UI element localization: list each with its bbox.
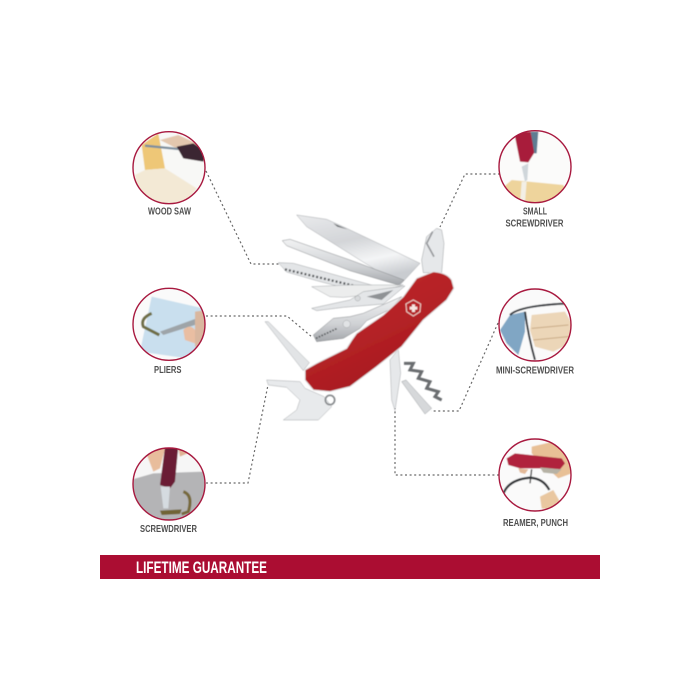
can opener tool: [267, 380, 332, 420]
leader line: small screwdriver: [440, 174, 500, 227]
leader line: pliers: [206, 316, 312, 337]
label: MINI-SCREWDRIVER: [496, 366, 575, 376]
banner: lifetime guarantee: [100, 555, 600, 579]
photo: punching a leather belt: [503, 442, 570, 510]
wood saw blade: [278, 263, 375, 289]
nail file blade: [282, 239, 404, 285]
key ring: [325, 395, 335, 405]
label: REAMER, PUNCH: [503, 518, 568, 529]
label: SMALL: [523, 206, 547, 218]
scissors: [312, 285, 405, 311]
leader line: screwdriver: [206, 385, 268, 483]
ring: [499, 289, 571, 361]
corkscrew: [404, 363, 442, 400]
panel: mini-screwdriver: [496, 287, 575, 376]
photo: small screwdriver on wood: [505, 132, 564, 202]
label: SCREWDRIVER: [140, 524, 198, 535]
label: WOOD SAW: [148, 206, 191, 218]
banner text: LIFETIME GUARANTEE: [136, 558, 267, 577]
bottom small blade: [390, 349, 401, 411]
panel: wood saw: [130, 128, 207, 218]
photo: pliers and hook: [140, 296, 204, 358]
panel: screwdriver: [130, 447, 207, 535]
pliers: [313, 297, 402, 342]
illustration: multi-tool knife: [265, 215, 454, 420]
main blade: [297, 215, 420, 285]
ring: [499, 439, 571, 511]
leader line: wood saw: [206, 171, 282, 264]
top right tool: [422, 228, 444, 273]
panel: reamer, punch: [497, 437, 573, 529]
leader line: reamer, punch: [395, 408, 499, 475]
panel: pliers: [130, 287, 207, 376]
photo: screwing a hook: [134, 448, 204, 520]
saw teeth: [285, 269, 363, 288]
reamer shaft: [402, 380, 432, 414]
panel: small screwdriver: [497, 128, 573, 230]
photo: repairing glasses: [500, 302, 570, 360]
ring: [133, 288, 205, 360]
ring: [133, 448, 205, 520]
ring: [499, 131, 571, 203]
cross shield logo: [406, 300, 421, 316]
leader line: mini-screwdriver: [431, 323, 498, 411]
ring: [133, 132, 205, 204]
awl blade: [265, 322, 309, 371]
blade nail mark: [333, 223, 347, 229]
red handle: [305, 272, 454, 392]
label: SCREWDRIVER: [506, 219, 564, 230]
label: PLIERS: [154, 365, 182, 376]
label: [506, 206, 564, 230]
photo: sawing wood: [134, 132, 204, 203]
